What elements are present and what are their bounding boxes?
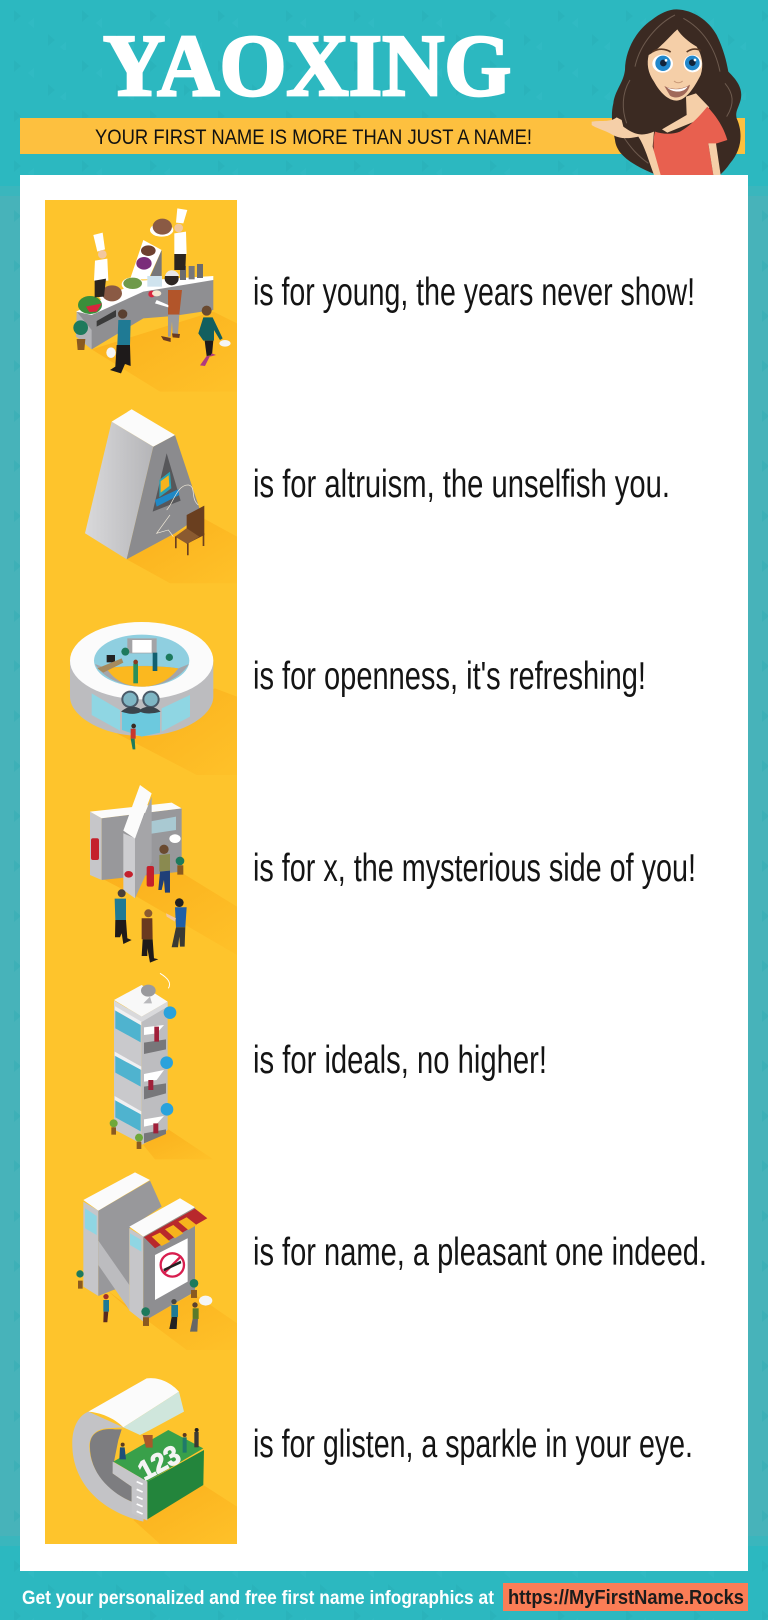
row: Y is for young — [73, 208, 695, 392]
person — [131, 724, 136, 749]
caption: is for ideals, no higher! — [253, 1039, 547, 1082]
plants — [76, 1270, 198, 1326]
illustration: tall building letter I — [110, 973, 213, 1159]
mascot: cartoon woman — [592, 9, 741, 175]
man in blue — [115, 889, 132, 944]
man in brown — [142, 909, 158, 963]
footer link badge: https://MyFirstName.Rocks — [508, 1587, 744, 1609]
row: X is for x — [90, 785, 696, 963]
illustration: letter X — [90, 785, 237, 963]
yellow illustration column — [45, 200, 237, 1544]
title: YAOXING — [103, 16, 511, 114]
green platform — [113, 1430, 204, 1521]
tagline: YOUR FIRST NAME IS MORE THAN JUST A NAME! — [95, 125, 532, 149]
plant — [176, 857, 184, 875]
plants — [110, 1119, 143, 1149]
illustration: ring building — [70, 622, 237, 775]
row: G is for glisten — [72, 1378, 693, 1544]
illustration: letter A — [85, 409, 237, 583]
fire extinguishers — [91, 838, 154, 887]
woman in green — [198, 306, 231, 366]
footer call to action: Get your personalized and free first name infographics at — [22, 1588, 495, 1609]
illustration: letter G — [72, 1378, 237, 1544]
left chef — [93, 233, 108, 297]
man in vest — [166, 898, 187, 947]
people — [119, 1428, 199, 1459]
row: N is for name — [76, 1172, 707, 1350]
customer in orange — [148, 270, 182, 342]
app bubbles — [160, 1006, 176, 1116]
potted plant — [73, 320, 88, 350]
no smoking sign — [155, 1238, 188, 1300]
right chef — [150, 208, 187, 270]
row: O is for openness — [70, 622, 646, 775]
caption: is for openness, it's refreshing! — [253, 655, 646, 698]
customer in teal — [106, 309, 131, 373]
row: I is for ideals — [110, 973, 547, 1159]
header band — [20, 118, 745, 154]
chair — [175, 506, 204, 555]
satellite dish — [141, 973, 170, 1003]
numbers 123: 123 — [133, 1439, 185, 1486]
row: A is for altruism — [85, 409, 670, 583]
illustration: buffet counter shaped like Y — [73, 208, 237, 392]
man in green — [158, 834, 181, 893]
illustration: letter N — [76, 1172, 237, 1350]
people — [103, 1294, 212, 1332]
awning — [144, 1209, 207, 1248]
